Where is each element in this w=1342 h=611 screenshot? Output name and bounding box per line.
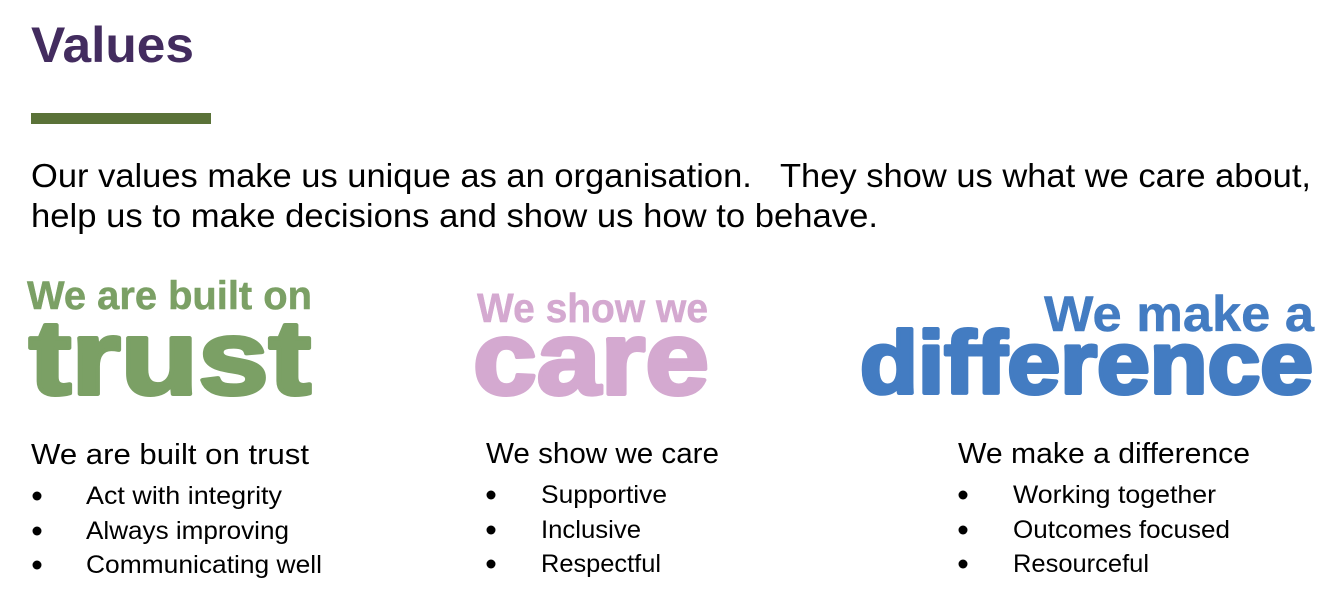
list: trust values: Act with integrity — [86, 482, 283, 510]
list: difference values: Working together — [1013, 481, 1216, 509]
list: trust values: Communicating well — [86, 551, 322, 579]
list: care values: Inclusive — [541, 516, 641, 544]
logo: we show we care: We show we — [477, 285, 708, 331]
logo: we show we care: care — [473, 301, 709, 417]
logo: we are built on trust: trust — [29, 299, 311, 417]
list: trust values — [32, 482, 322, 579]
panel: trust — [27, 274, 322, 579]
title: Values — [31, 17, 194, 73]
list: trust values: Always improving — [86, 517, 289, 545]
intro paragraph — [31, 157, 1311, 234]
intro paragraph: Our values make us unique as an organisation. They show us what we care about, — [31, 157, 1311, 194]
list: care values: Respectful — [541, 550, 661, 578]
logo: we are built on trust: We are built on — [27, 274, 312, 318]
logo: we make a difference: difference — [860, 313, 1313, 412]
list: difference values: Resourceful — [1013, 550, 1149, 578]
heading: we make a difference: We make a difference — [958, 438, 1250, 470]
list: difference values: Outcomes focused — [1013, 516, 1230, 544]
logo: we make a difference: We make a — [1044, 286, 1315, 342]
heading: we show we care: We show we care — [486, 438, 719, 470]
panel: care — [473, 285, 719, 578]
panel: difference — [860, 286, 1315, 578]
logo: we are built on trust — [27, 274, 312, 417]
intro paragraph: help us to make decisions and show us how to behave. — [31, 197, 878, 234]
list: difference values — [958, 481, 1230, 578]
list: care values — [486, 481, 667, 578]
heading: we are built on trust: We are built on trust — [31, 439, 309, 471]
title underline bar — [31, 113, 211, 124]
list: care values: Supportive — [541, 481, 667, 509]
